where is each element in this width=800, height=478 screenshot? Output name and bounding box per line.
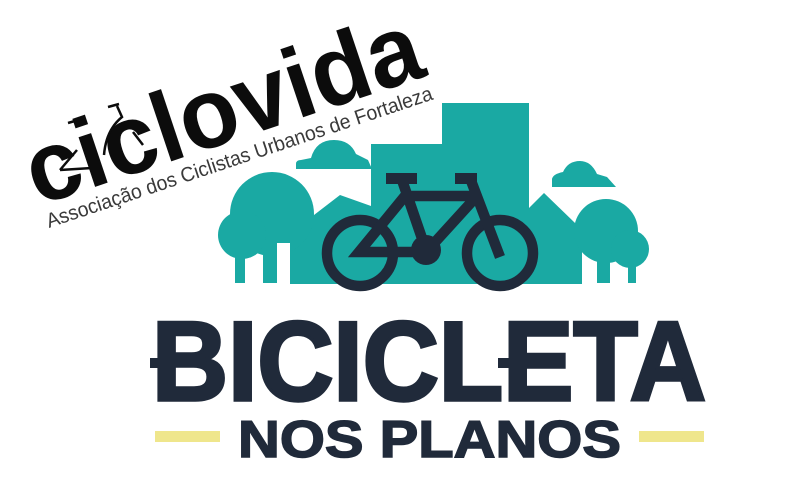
frame <box>359 178 500 257</box>
title letter spurs <box>150 358 510 368</box>
buildings <box>290 103 582 284</box>
cloud left <box>296 140 372 169</box>
wheels <box>327 220 393 286</box>
cloud right <box>552 161 616 187</box>
Ciclovida logo <box>9 0 436 233</box>
saddle <box>386 173 417 184</box>
right yellow dash <box>639 431 704 442</box>
title: BICICLETA <box>150 299 706 424</box>
logo tagline: Associação dos Ciclistas Urbanos de Fortaleza <box>43 82 436 233</box>
handlebar <box>455 173 477 184</box>
subtitle: NOS PLANOS: NOS PLANOS <box>238 411 621 469</box>
left yellow dash <box>155 431 220 442</box>
tree left <box>218 172 314 283</box>
title text: BICICLETA <box>152 299 706 424</box>
tree right <box>574 199 649 283</box>
city skyline illustration <box>218 103 649 284</box>
bottom bracket <box>411 235 441 265</box>
logo bike details <box>60 104 143 170</box>
bicycle icon <box>327 173 533 286</box>
